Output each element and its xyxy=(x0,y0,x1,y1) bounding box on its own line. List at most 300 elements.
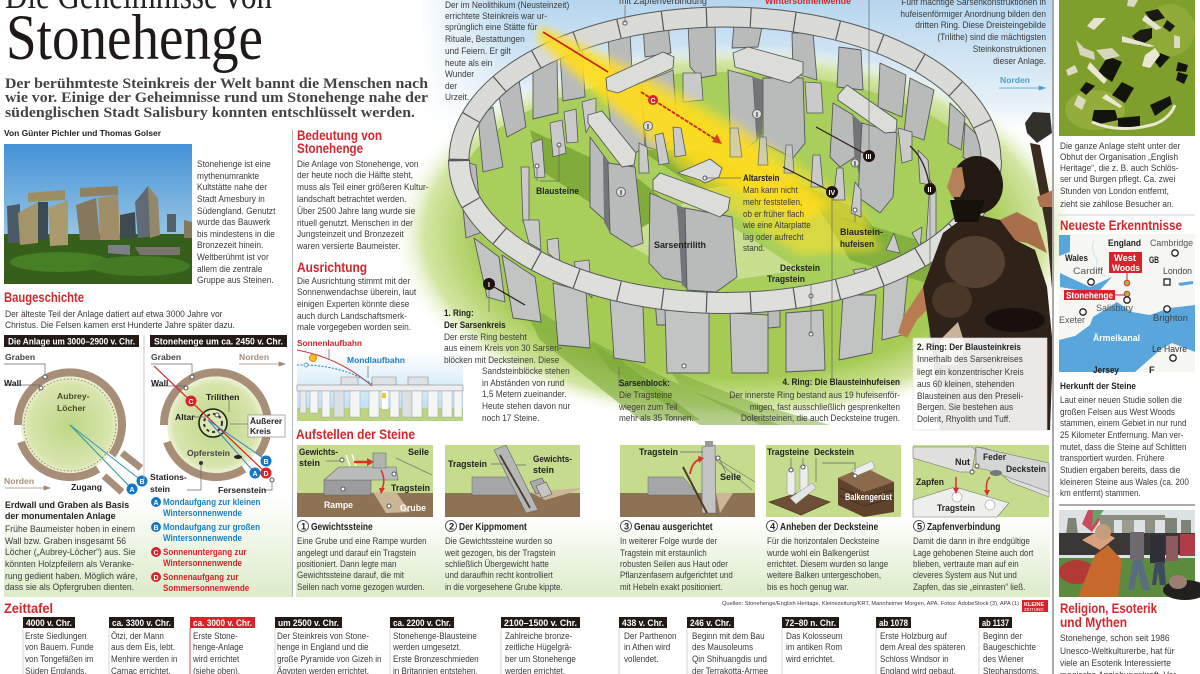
timeline entry: 246 v. Chr.: Qin Shihuangdis und xyxy=(692,653,767,664)
text: Erdwall und Graben: dass sie als Opfergruben dienten. xyxy=(5,582,134,592)
legend: Mond und Sonne: Sommersonnenwende xyxy=(163,583,249,593)
arrow: Norden xyxy=(999,75,1045,90)
text: Stonehenge description: Südengland. Genutzt xyxy=(197,206,276,216)
text: Sarsenblock: Sarsenblock: xyxy=(619,378,670,388)
timeline entry: 72-80 n. Chr.: wird errichtet. xyxy=(785,653,834,664)
step 4 text: errichtet. Diesem wurden so lange xyxy=(767,558,888,569)
text: Erdwall und Graben: könnten Holzpfeilern als Veranke- xyxy=(5,559,134,569)
legend: Mond und Sonne: Wintersonnenwende xyxy=(163,558,242,568)
timeline entry: 4000 v. Chr. xyxy=(23,617,94,674)
illustration: front half of sarsen ring xyxy=(459,160,991,303)
labels: stones: Deckstein xyxy=(780,263,820,273)
timeline entry: ca. 3300 v. Chr.: aus dem Eis, lebt. xyxy=(111,641,175,652)
step 2 text: schließlich Übergewicht hatte xyxy=(445,558,549,569)
text: Neolithikum intro xyxy=(445,0,569,102)
text: Baugeschichte intro: Christus. Die Felsen kamen erst Hunderte Jahre später dazu. xyxy=(5,320,235,330)
panel: 2. Ring: Dolerit, Rhyolith und Tuff. xyxy=(917,414,1011,424)
panel background: Aufstellen tint xyxy=(296,517,1050,597)
panel: 2. Ring: Innerhalb des Sarsenkreises xyxy=(917,354,1023,364)
heading: Bedeutung von Stonehenge: Bedeutung von xyxy=(297,127,382,143)
map: southern England: Stonehenge xyxy=(1066,290,1113,300)
intro text: wie vor. Einige der Geheimnisse rund um Stonehenge nahe der xyxy=(5,90,429,106)
timeline entry: ca. 2200 v. Chr.: Stonehenge-Blausteine xyxy=(393,630,477,641)
timeline entry: ca. 2200 v. Chr.: ca. 2200 v. Chr. xyxy=(393,618,451,628)
timeline entry: ca. 3300 v. Chr. xyxy=(109,617,177,674)
map: southern England xyxy=(1059,234,1195,375)
text: Herkunft der Steine: 25 Kilometer Entfernung. Man ver- xyxy=(1060,429,1183,440)
diagram: Anlage 3000-2900 v. Chr.: Norden xyxy=(4,476,34,486)
map: southern England: England xyxy=(1108,238,1141,248)
step 4 text: Für die horizontalen Decksteine xyxy=(767,535,879,546)
step 5 illustration: Zapfenverbindung: Deckstein xyxy=(1006,464,1046,474)
step 3 text: In weiterer Folge wurde der xyxy=(620,535,717,546)
step 3 text: robusten Seilen aus Haut oder xyxy=(620,558,728,569)
step 1 text: 1 xyxy=(301,522,306,532)
timeline entry: 2100-1500 v. Chr.: 2100–1500 v. Chr. xyxy=(504,618,577,628)
text: English Heritage: ser und Burgen pflegt. Ca. zwei xyxy=(1060,174,1175,184)
step 5 text: Damit die dann in ihre endgültige xyxy=(913,535,1030,546)
text: Herkunft der Steine: Herkunft der Steine xyxy=(1060,380,1136,391)
timeline entry: ca. 3000 v. Chr.: henge-Anlage xyxy=(193,641,243,652)
mini illustration: Sonnen- und Mondlaufbahn: Mondlaufbahn xyxy=(347,355,405,365)
timeline entry: 2100-1500 v. Chr.: Zahlreiche bronze- xyxy=(505,630,572,641)
text: Bedeutung: Über 2500 Jahre lang wurde sie xyxy=(297,206,415,216)
diagram: Stonehenge um ca. 2450 v. Chr.: Graben xyxy=(151,352,181,362)
map: southern England: London xyxy=(1163,265,1192,276)
step 4 illustration: Anheben der Decksteine: Tragsteine xyxy=(767,447,809,457)
leader lines and roman numeral markers: I xyxy=(756,112,758,119)
timeline entry: 246 v. Chr.: Beginn mit dem Bau xyxy=(692,630,765,641)
text: Stonehenge description: wurde das Bauwerk xyxy=(196,217,271,227)
timeline entry: 438 v. Chr.: Der Parthenon xyxy=(624,630,677,641)
panel: 2. Ring: Blausteinen aus den Preseli- xyxy=(917,391,1023,401)
leader lines and roman numeral markers: IV xyxy=(828,190,835,197)
text: Bedeutung: landschaft betrachtet werden. xyxy=(297,194,406,204)
text: Stonehenge description: allem die zentrale xyxy=(197,264,262,274)
text: 1. Ring Sarsenkreis: 1,5 Metern zueinander. xyxy=(482,389,567,399)
illustration: trilithon back left xyxy=(607,70,678,153)
timeline entry: 438 v. Chr.: in Athen wird xyxy=(624,641,670,652)
text: Bedeutung: muss als Teil einer größeren Kultur- xyxy=(297,182,429,192)
diagram: Stonehenge um ca. 2450 v. Chr.: Norden xyxy=(239,352,269,362)
heading: Religion, Esoterik und Mythen: Religion, Esoterik xyxy=(1060,600,1157,616)
legend: Mond und Sonne xyxy=(151,497,260,593)
step 4 text: wurde wohl ein Balkengerüst xyxy=(766,547,870,558)
step 4 text xyxy=(766,520,888,592)
text: Bedeutung: waren versierte Baumeister. xyxy=(296,241,400,251)
step 5 illustration: Zapfenverbindung: Feder xyxy=(983,452,1006,462)
timeline entry: ab 1137: ab 1137 xyxy=(982,618,1009,628)
step 3 text: Tragstein mit erstaunlich xyxy=(620,547,707,558)
step 4 illustration: Anheben der Decksteine: Deckstein xyxy=(814,447,854,457)
text: 1. Ring Sarsenkreis: aus einem Kreis von 30 Sarsen- xyxy=(444,343,562,353)
timeline entry: ca. 2200 v. Chr. xyxy=(390,617,479,674)
text: Neolithikum intro: und Feiern. Er gilt xyxy=(445,46,511,56)
text: Stonehenge description: Weltberühmt ist vor xyxy=(197,252,269,262)
text: Stonehenge description xyxy=(196,159,276,285)
heading: Baugeschichte: Baugeschichte xyxy=(4,289,84,305)
text: Herkunft der Steine: großen Felsen aus West Woods xyxy=(1060,406,1176,417)
text: Religion: viele an Esoterik Interessierte xyxy=(1060,658,1171,668)
text: Altarstein: lag oder aufrecht xyxy=(743,231,804,242)
timeline entry: ca. 3000 v. Chr.: ca. 3000 v. Chr. xyxy=(193,618,252,628)
step 1 text xyxy=(297,520,427,592)
step 4 illustration: Anheben der Decksteine xyxy=(766,445,901,517)
diagram: Stonehenge um ca. 2450 v. Chr.: C xyxy=(188,399,194,406)
timeline entry: ca. 2200 v. Chr.: Erste Bronzeschmieden xyxy=(393,653,479,664)
step 2 illustration: Der Kippmoment xyxy=(445,445,580,517)
map: southern England: F xyxy=(1149,365,1155,375)
timeline entry: ab 1078: dem Areal des späteren xyxy=(880,641,965,652)
diagram: Anlage 3000-2900 v. Chr.: Löcher xyxy=(57,403,86,413)
map: southern England: Woods xyxy=(1112,263,1140,273)
text: Sarsenblock xyxy=(618,378,694,423)
right column divider xyxy=(1052,0,1054,674)
step 2 text: in die vorgesehene Grube kippte. xyxy=(445,581,563,592)
timeline entry: 246 v. Chr. xyxy=(687,617,768,674)
step 5 text: Lage gehobenen Steine auch dort xyxy=(913,547,1034,558)
illustration: back uprights xyxy=(458,23,989,238)
logo: Kleine Zeitung: KLEINE xyxy=(1024,602,1044,608)
step 5 text: 5 xyxy=(917,522,922,532)
legend: Mond und Sonne: Sonnenaufgang zur xyxy=(163,572,239,582)
legend: Mond und Sonne: Wintersonnenwende xyxy=(163,508,242,518)
text: Baugeschichte intro: Der älteste Teil der Anlage datiert auf etwa 3000 Jahre vor xyxy=(5,309,222,319)
text: dritter Ring: (Trilithe) sind die mächtigsten xyxy=(937,32,1046,42)
text: dritter Ring: dritten Ring. Diese Dreisteingebilde xyxy=(915,20,1046,30)
step 5 illustration: Zapfenverbindung: Zapfen xyxy=(916,477,944,487)
diagram: Stonehenge um ca. 2450 v. Chr. xyxy=(150,335,287,495)
text: Baugeschichte intro xyxy=(5,309,235,330)
step 1 text: angelegt und darauf ein Tragstein xyxy=(297,547,416,558)
text: Bedeutung: Jungsteinzeit und Bronzezeit xyxy=(297,229,404,239)
text: Altarstein: wie eine Altarplatte xyxy=(742,219,811,230)
timeline entry: ab 1137: des Wiener xyxy=(983,653,1024,664)
logo: Kleine Zeitung: ZEITUNG xyxy=(1024,607,1044,612)
timeline entry: 4000 v. Chr.: von Bauern. Funde xyxy=(25,641,94,652)
text: 1. Ring Sarsenkreis: blöcken mit Decksteinen. Diese xyxy=(444,355,559,365)
labels: stones xyxy=(536,186,883,284)
timeline entry: ca. 3300 v. Chr.: ca. 3300 v. Chr. xyxy=(112,618,171,628)
text: Sarsenblock: Die Tragsteine xyxy=(619,390,672,400)
text: Stonehenge description: Gruppe aus Steinen. xyxy=(197,275,274,285)
text: Herkunft der Steine: transportiert wurden. Frühere xyxy=(1060,452,1165,463)
timeline entry: 438 v. Chr.: vollendet. xyxy=(624,653,659,664)
step 2 illustration: Der Kippmoment: stein xyxy=(533,465,554,475)
heading: Bedeutung von Stonehenge: Stonehenge xyxy=(297,140,363,156)
text: Herkunft der Steine: mutet, dass die Steine auf Schlitten xyxy=(1060,441,1187,452)
timeline entry: ca. 3000 v. Chr.: wird errichtet xyxy=(192,653,240,664)
step 1 text: Gewichtssteine xyxy=(311,521,373,532)
illustration: altar stone xyxy=(678,159,722,183)
timeline entry: 72-80 n. Chr.: im antiken Rom xyxy=(786,641,842,652)
timeline entry: 438 v. Chr. xyxy=(619,617,677,674)
map: southern England: Salisbury xyxy=(1096,302,1133,313)
text: 4. Ring: 4. Ring: Die Blausteinhufeisen xyxy=(782,377,900,387)
timeline entry: 2100-1500 v. Chr.: ber um Stonehenge xyxy=(505,653,576,664)
panel: 2. Ring: liegt ein konzentrischer Kreis xyxy=(917,367,1024,377)
timeline entry: um 2500 v. Chr. xyxy=(275,617,382,674)
text: Ausrichtung xyxy=(297,276,417,332)
timeline entry: ab 1137: Beginn der xyxy=(983,630,1022,641)
labels: stones: Blausteine xyxy=(536,186,579,196)
text: Altarstein: ob er früher flach xyxy=(743,208,804,219)
step 2 illustration: Der Kippmoment: Gewichts- xyxy=(533,454,572,464)
text: 4. Ring: Doleritsteinen, die auch Decksteine trugen. xyxy=(741,413,900,423)
text: Bedeutung xyxy=(296,159,429,251)
text: 1. Ring Sarsenkreis: noch 17 Steine. xyxy=(482,413,539,423)
divider between diagrams xyxy=(143,335,145,480)
text: English Heritage: Die ganze Anlage steht unter der xyxy=(1060,141,1180,151)
timeline entry: 2100-1500 v. Chr.: zeitliche Hügelgrä- xyxy=(505,641,572,652)
heading: Bedeutung von Stonehenge xyxy=(297,127,382,156)
step 3 text: Genau ausgerichtet xyxy=(634,521,713,532)
step 3 text: 3 xyxy=(624,522,629,532)
text: Altarstein: Man kann nicht xyxy=(743,184,798,195)
text: Herkunft der Steine: Studien ergaben bereits, dass die xyxy=(1060,464,1180,475)
text: dritter Ring xyxy=(900,0,1046,66)
text: 1. Ring Sarsenkreis: Heute stehen davon nur xyxy=(482,401,570,411)
step 5 text: Zapfen, das sie „einrasten“ ließ. xyxy=(913,581,1025,592)
text: Bedeutung: Die Anlage von Stonehenge, von xyxy=(297,159,419,169)
panel: 2. Ring: 2. Ring: Der Blausteinkreis xyxy=(917,342,1021,352)
panel: 2. Ring: aus 60 kleinen, stehenden xyxy=(917,379,1014,389)
text: English Heritage xyxy=(1060,141,1180,209)
text: Stonehenge description: Kultstätte nahe der xyxy=(197,182,267,192)
text: 4. Ring xyxy=(729,377,900,423)
map: southern England: Cardiff xyxy=(1073,265,1103,276)
panel: 2. Ring: Bergen. Sie bestehen aus xyxy=(917,402,1014,412)
step 3 text xyxy=(620,520,733,592)
byline: Von Günter Pichler und Thomas Golser xyxy=(4,128,162,138)
map: southern England: GB xyxy=(1149,255,1159,265)
step 1 illustration: Gewichtssteine: Grube xyxy=(400,503,426,513)
text: Neolithikum intro: der xyxy=(445,81,457,91)
illustration: trilithon front left xyxy=(588,111,643,247)
timeline entry: 4000 v. Chr.: von Tongefäßen im xyxy=(25,653,93,664)
step 3 illustration: Genau ausgerichtet: Seile xyxy=(720,472,741,482)
text: Religion: Unesco-Weltkulturerbe, hat für xyxy=(1060,646,1175,656)
text: English Heritage: Stunden von London entfernt, xyxy=(1060,186,1169,196)
timeline entry: ab 1078: Schloss Windsor in xyxy=(880,653,949,664)
timeline entry: 4000 v. Chr.: 4000 v. Chr. xyxy=(26,618,72,628)
source credits: Quellen: Stonehenge/English Heritage, Kleinezeitung/KRT, Mannheimer Morgen, APA. Fotos: AdobeStock (3), APA (1) xyxy=(722,601,1019,607)
leader lines and roman numeral markers xyxy=(483,0,936,386)
text: Neolithikum intro: errichtete Steinkreis war ur- xyxy=(445,11,547,21)
timeline entry: ab 1078 xyxy=(876,617,965,674)
legend: Mond und Sonne: A xyxy=(154,500,159,507)
diagram: Anlage 3000-2900 v. Chr.: Zugang xyxy=(71,482,102,492)
text: Stonehenge description: Stadt Amesbury in xyxy=(197,194,265,204)
step 2 text: Die Gewichtssteine wurden so xyxy=(445,535,553,546)
text: Altarstein: stand. xyxy=(743,242,765,253)
step 5 text: cleveres System aus Nut und xyxy=(913,569,1017,580)
step 1 text: Gewichtssteine darauf, die mit xyxy=(297,569,404,580)
text: dritter Ring: Steinkonstruktionen xyxy=(973,44,1046,54)
step 5 illustration: Zapfenverbindung: Nut xyxy=(955,457,970,467)
text: 1. Ring Sarsenkreis: Sandsteinblöcke stehen xyxy=(482,366,570,376)
step 1 illustration: Gewichtssteine: Rampe xyxy=(324,500,353,510)
illustration: sun ray with axis arrow xyxy=(536,25,880,255)
mini illustration: Sonnen- und Mondlaufbahn xyxy=(297,338,463,421)
legend: Mond und Sonne: Sonnenuntergang zur xyxy=(163,547,247,557)
step 5 text: Zapfenverbindung xyxy=(927,521,1000,532)
illustration: bluestone circle xyxy=(521,73,936,298)
step 3 illustration: Genau ausgerichtet: Tragstein xyxy=(639,447,678,457)
map: southern England: West xyxy=(1114,253,1136,263)
panel: 2. Ring xyxy=(913,338,1047,430)
timeline entry: um 2500 v. Chr.: henge in England und die xyxy=(277,641,369,652)
intro text: südenglischen Stadt Salisbury konnten entschlüsselt werden. xyxy=(5,105,415,121)
diagram: Stonehenge um ca. 2450 v. Chr.: Kreis xyxy=(250,426,271,436)
text: 4. Ring: Der innerste Ring bestand aus 19 hufeisenför- xyxy=(729,390,900,400)
photo: crowd at Stonehenge xyxy=(1059,510,1200,600)
timeline entry: 72-80 n. Chr.: 72–80 n. Chr. xyxy=(785,618,836,628)
text: Erdwall und Graben: Wall bzw. Graben insgesamt 56 xyxy=(5,536,126,546)
step 3 illustration: Genau ausgerichtet xyxy=(620,441,755,517)
timeline entry: 246 v. Chr.: 246 v. Chr. xyxy=(690,618,731,628)
legend: Mond und Sonne: Mondaufgang zur kleinen xyxy=(163,497,260,507)
text: Erdwall und Graben: Frühe Baumeister hoben in einem xyxy=(5,524,135,534)
diagram: Anlage 3000-2900 v. Chr.: A xyxy=(130,487,135,494)
text: English Heritage: zieht sie zahllose Besucher an. xyxy=(1060,199,1174,209)
labels: stones: Tragstein xyxy=(767,274,805,284)
photo: Stonehenge at daylight xyxy=(4,144,192,284)
main illustration: sky and ground xyxy=(390,0,1080,427)
text: dritter Ring: hufeisenförmiger Anordnung bilden den xyxy=(900,9,1046,19)
step 1 illustration: Gewichtssteine: stein xyxy=(299,458,320,468)
diagram: Stonehenge um ca. 2450 v. Chr.: Trilithen xyxy=(206,392,239,402)
text: 1. Ring Sarsenkreis: Der Sarsenkreis xyxy=(444,320,506,330)
diagram: Stonehenge um ca. 2450 v. Chr.: Äußerer xyxy=(250,416,283,426)
step 4 text: weitere Balken untergeschoben, xyxy=(766,569,881,580)
text: Erdwall und Graben: Löcher („Aubrey-Löcher“) aus. Sie xyxy=(5,547,136,557)
timeline entry: ca. 3300 v. Chr.: Ötzi, der Mann xyxy=(111,630,164,641)
text: Erdwall und Graben xyxy=(5,500,137,592)
step 1 text: Eine Grube und eine Rampe wurden xyxy=(297,535,427,546)
arrow: Norden: Norden xyxy=(1000,75,1030,85)
step 1 illustration: Gewichtssteine: Gewichts- xyxy=(299,447,338,457)
map: southern England: Ärmelkanal xyxy=(1093,333,1140,343)
step 1 illustration: Gewichtssteine xyxy=(297,445,433,517)
logo: Kleine Zeitung xyxy=(1022,600,1048,612)
timeline entry: ca. 3300 v. Chr.: Menhire werden in xyxy=(111,653,177,664)
step 4 illustration: Anheben der Decksteine: Balkengerüst xyxy=(845,492,892,502)
leader lines and roman numeral markers: I xyxy=(488,282,490,289)
text: Neolithikum intro: Urzeit. xyxy=(445,92,469,102)
text: Ausrichtung: male vorgegeben worden sein. xyxy=(297,322,411,332)
legend: Mond und Sonne: C xyxy=(154,550,159,557)
diagram: Anlage 3000-2900 v. Chr. xyxy=(4,335,148,494)
step 3 text: mit Hebeln exakt positioniert. xyxy=(620,581,723,592)
diagram: Anlage 3000-2900 v. Chr.: B xyxy=(140,479,145,486)
step 1 illustration: Gewichtssteine: Seile xyxy=(408,447,429,457)
text: 1. Ring Sarsenkreis: in Abständen von rund xyxy=(482,378,564,388)
step 2 illustration: Der Kippmoment: Tragstein xyxy=(448,459,487,469)
timeline entry: um 2500 v. Chr.: große Pyramide von Gizeh in xyxy=(277,653,382,664)
timeline entry: 438 v. Chr.: 438 v. Chr. xyxy=(622,618,664,628)
step 2 text: 2 xyxy=(449,522,454,532)
divider right column xyxy=(1059,214,1195,216)
text: Neolithikum intro: heute als ein xyxy=(445,58,492,68)
text: Erdwall und Graben: rung gedient haben. Möglich wäre, xyxy=(5,571,137,581)
step 4 text: 4 xyxy=(770,522,776,532)
leader lines and roman numeral markers: II xyxy=(928,187,931,194)
diagram: Anlage 3000-2900 v. Chr.: Wall xyxy=(4,378,21,388)
intro text: Der berühmteste Steinkreis der Welt bannt die Menschen nach xyxy=(5,76,428,92)
timeline entry: ab 1137 xyxy=(979,617,1039,674)
text: Altarstein: Altarstein xyxy=(743,172,779,183)
timeline entry: ab 1078: ab 1078 xyxy=(879,618,908,628)
step 1 illustration: Gewichtssteine: Tragstein xyxy=(391,483,430,493)
legend: Mond und Sonne: Mondaufgang zur großen xyxy=(163,522,260,532)
diagram: Stonehenge um ca. 2450 v. Chr.: Wall xyxy=(151,378,168,388)
legend: Mond und Sonne: Wintersonnenwende xyxy=(163,533,242,543)
timeline entry: ab 1078: Erste Holzburg auf xyxy=(880,630,947,641)
column divider xyxy=(292,130,294,597)
text: Neolithikum intro: sprünglich eine Stätte für xyxy=(445,22,537,32)
marker: sun C xyxy=(648,95,658,105)
text: Stonehenge description: Stonehenge ist eine xyxy=(197,159,271,169)
step 2 text xyxy=(444,520,563,592)
timeline entry: 2100-1500 v. Chr. xyxy=(501,617,580,674)
step 4 text: bis es hoch genug war. xyxy=(767,581,849,592)
labels: stones: Sarsentrilith xyxy=(654,240,706,250)
heading: Ausrichtung: Ausrichtung xyxy=(297,259,367,275)
step 3 text: Pflanzenfasern aufgerichtet und xyxy=(620,569,733,580)
text: Ausrichtung: Die Ausrichtung stimmt mit der xyxy=(297,276,410,286)
text: Religion xyxy=(1060,633,1176,674)
timeline entry: ca. 3000 v. Chr. xyxy=(190,617,255,674)
step 2 text: und daraufhin recht kontrolliert xyxy=(445,569,553,580)
text: Stonehenge description: bis mindestens in die xyxy=(197,229,275,239)
illustration: front uprights xyxy=(474,227,922,373)
illustration: caveman with club xyxy=(898,112,1053,430)
map: southern England: Cambridge xyxy=(1150,237,1193,248)
timeline entry: ca. 3000 v. Chr.: Erste Stone- xyxy=(193,630,238,641)
panel background: Baugeschichte lower tint xyxy=(4,495,292,597)
timeline entry: 4000 v. Chr.: Erste Siedlungen xyxy=(25,630,87,641)
step 1 text: Seilen nach vorne gezogen wurden. xyxy=(297,581,424,592)
text: Neolithikum intro: Rituale, Bestattungen xyxy=(445,34,525,44)
legend: Mond und Sonne: D xyxy=(154,575,159,582)
text: English Heritage: Heritage“, die z. B. auch Schlös- xyxy=(1060,163,1179,173)
step 5 text: blieben, vertraute man auf ein xyxy=(913,558,1019,569)
text: 1. Ring Sarsenkreis: 1. Ring: xyxy=(444,308,474,318)
diagram: Anlage 3000-2900 v. Chr.: Graben xyxy=(5,352,35,362)
illustration: trilithon lintel back left xyxy=(606,52,674,93)
text: Bedeutung: der heute noch die Hälfte steht, xyxy=(297,170,413,180)
diagram: Anlage 3000-2900 v. Chr.: Aubrey- xyxy=(57,391,90,401)
labels: stones: hufeisen xyxy=(840,239,874,249)
leader lines and roman numeral markers: I xyxy=(854,161,856,168)
marker: sun C: C xyxy=(650,98,656,105)
text: Ausrichtung: auch durch Landschaftsmerk- xyxy=(297,311,407,321)
diagram: Stonehenge um ca. 2450 v. Chr.: Stations- xyxy=(150,472,187,482)
diagram: Stonehenge um ca. 2450 v. Chr.: Altar xyxy=(175,412,195,422)
leader lines and roman numeral markers: I xyxy=(620,190,622,197)
text: Bedeutung: rituell genutzt. Menschen in der xyxy=(297,218,413,228)
leader lines and roman numeral markers: III xyxy=(866,154,871,161)
timeline entry: ab 1137: Baugeschichte xyxy=(983,641,1036,652)
text: Altarstein: mehr feststellen, xyxy=(743,196,802,207)
map: southern England: Le Havre xyxy=(1152,343,1187,354)
illustration: trilithon front centre (Sarsentrilith) xyxy=(649,173,737,292)
text: Ausrichtung: einigen Experten könnte diese xyxy=(297,299,409,309)
step 4 text: Anheben der Decksteine xyxy=(780,521,878,532)
text: 4. Ring: migen, fast ausschließlich gesprenkelten xyxy=(750,402,900,412)
diagram: Stonehenge um ca. 2450 v. Chr.: B xyxy=(264,459,269,466)
